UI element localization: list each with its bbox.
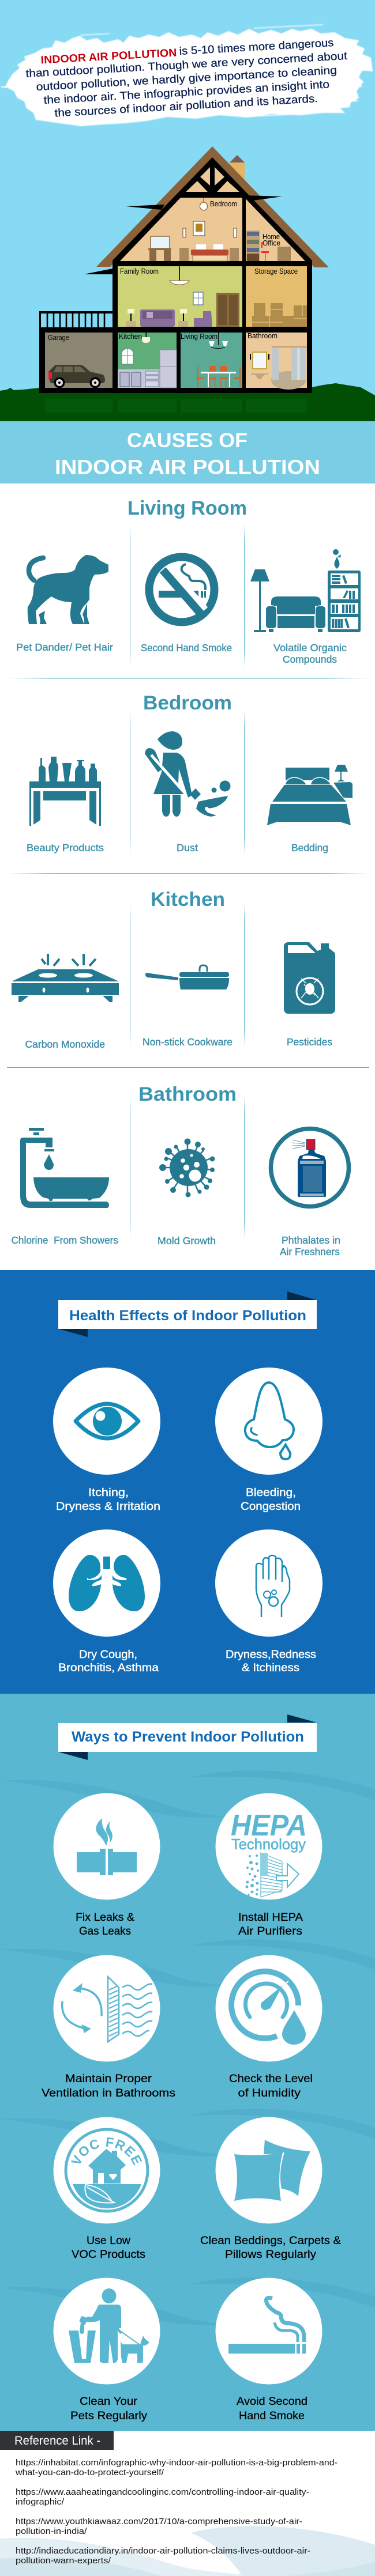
labels: Pets Regularly <box>70 2409 147 2422</box>
room: bedroom <box>120 198 242 261</box>
reference links: https://inhabitat.com/infographic-why-indoor-air-pollution-is-a-big-problem-and- <box>16 2458 337 2468</box>
tip: HEPA filter: Technology <box>231 1835 306 1853</box>
reference links: pollution-in-india/ <box>16 2526 87 2536</box>
heading: Living Room <box>127 497 247 519</box>
banner: ways to prevent: Ways to Prevent Indoor Pollution <box>72 1729 304 1745</box>
icon: sofa, lamp and bookshelf <box>250 549 361 632</box>
panel: references <box>0 2431 375 2576</box>
labels <box>12 1234 340 1257</box>
labels: Dryness,Redness <box>226 1648 316 1661</box>
labels: Congestion <box>241 1500 301 1513</box>
house illustration <box>39 146 329 393</box>
room: storage space: Storage Space <box>254 267 298 275</box>
labels: Phthalates in <box>282 1234 340 1246</box>
labels: Compounds <box>283 654 337 665</box>
room: bathroom: Bathroom <box>247 332 278 340</box>
labels <box>16 641 347 665</box>
intro text: the sources of indoor air pollution and its hazards. <box>54 93 318 119</box>
icon: bathtub and tap <box>20 1128 109 1208</box>
tip: VOC free badge: VOC FREE <box>70 2137 142 2166</box>
icon: mold virus <box>159 1139 215 1198</box>
panel: bedroom <box>7 692 369 874</box>
icon: bed <box>267 765 352 825</box>
reference links: pollution-warn-experts/ <box>16 2556 111 2566</box>
labels: of Humidity <box>238 2087 301 2099</box>
panel: kitchen <box>7 889 369 1068</box>
effect: nose <box>215 1368 322 1475</box>
title: INDOOR AIR POLLUTION <box>55 456 320 478</box>
eave spikes <box>84 195 282 274</box>
panel: bathroom <box>12 1083 348 1257</box>
intro text: than outdoor pollution. Though we are very concerned about <box>25 50 348 80</box>
labels: Install HEPA <box>238 1911 303 1924</box>
icon: non-stick pan <box>145 965 229 989</box>
labels: & Itchiness <box>242 1661 299 1674</box>
icon: car <box>48 365 105 388</box>
panel: health effects <box>0 1270 375 1694</box>
labels: Gas Leaks <box>79 1925 131 1937</box>
room: family room: Family Room <box>120 267 159 275</box>
effect: eye <box>53 1368 160 1475</box>
labels: Beauty Products <box>27 842 104 853</box>
icon: dog <box>28 555 108 624</box>
icon: woman sweeping dust <box>145 731 231 817</box>
tip: pets <box>53 2277 160 2385</box>
labels: Second Hand Smoke <box>141 642 232 654</box>
tip: humidity gauge <box>216 1955 322 2062</box>
heading: Bedroom <box>143 692 232 714</box>
labels: VOC Products <box>72 2248 145 2261</box>
ground <box>0 383 375 422</box>
intro text: is 5-10 times more dangerous <box>179 37 334 58</box>
effect: lungs <box>53 1529 160 1637</box>
labels: Fix Leaks & <box>76 1911 134 1924</box>
room: kitchen: Kitchen <box>119 333 142 341</box>
attic truss <box>186 167 239 192</box>
intro text: INDOOR AIR POLLUTION <box>40 47 177 66</box>
room: bedroom: Bedroom <box>210 200 237 208</box>
labels: Chlorine From Showers <box>12 1234 118 1246</box>
room: family room <box>118 266 242 327</box>
labels <box>25 1036 332 1050</box>
room: home office: Office <box>262 239 280 247</box>
banner: health effects <box>58 1291 317 1337</box>
balcony rail <box>39 311 112 327</box>
panel: causes title band <box>0 421 375 484</box>
icon: chimney <box>230 155 245 180</box>
room: storage space <box>246 266 307 327</box>
tip: VOC free badge <box>53 2117 160 2223</box>
labels: Mold Growth <box>158 1235 216 1247</box>
labels: Avoid Second <box>237 2395 308 2408</box>
effect: skin hand <box>215 1529 322 1637</box>
reference heading <box>0 2431 114 2450</box>
labels: Maintain Proper <box>65 2072 152 2085</box>
labels: Itching, <box>88 1486 129 1499</box>
labels: Clean Your <box>80 2395 138 2408</box>
labels: Non-stick Cookware <box>142 1036 232 1048</box>
title <box>55 429 320 478</box>
labels: Ventilation in Bathrooms <box>42 2087 175 2099</box>
heading: Kitchen <box>151 889 225 911</box>
banner: health effects: Health Effects of Indoor Pollution <box>69 1308 306 1324</box>
labels: Carbon Monoxide <box>25 1038 105 1050</box>
icon: stove <box>12 954 119 1002</box>
icon: no smoking <box>149 557 215 622</box>
labels: Bleeding, <box>246 1486 296 1499</box>
labels: Use Low <box>87 2234 131 2247</box>
house frame <box>39 157 312 393</box>
labels <box>27 842 328 853</box>
labels: Clean Beddings, Carpets & <box>200 2234 341 2247</box>
reference links: infographic/ <box>16 2497 65 2507</box>
room: kitchen <box>118 333 177 388</box>
title: CAUSES OF <box>127 429 247 452</box>
reference links <box>15 2458 337 2566</box>
room: living room <box>181 333 242 388</box>
reference links: what-you-can-do-to-protect-yourself/ <box>15 2468 164 2477</box>
intro text: outdoor pollution, we hardly give importance to cleaning <box>36 65 337 93</box>
intro brush stroke <box>1 24 373 126</box>
reference links: http://indiaeducationdiary.in/indoor-air-pollution-claims-lives-outdoor-air- <box>16 2546 310 2556</box>
labels: Bedding <box>291 842 328 853</box>
labels: Hand Smoke <box>239 2409 305 2422</box>
labels: Air Freshners <box>280 1246 340 1257</box>
labels <box>42 1911 341 2422</box>
intro text: the indoor air. The infographic provides an insight into <box>43 78 330 107</box>
reference links: https://www.aaaheatingandcoolinginc.com/controlling-indoor-air-quality- <box>16 2487 309 2497</box>
reference heading: Reference Link - <box>14 2434 100 2447</box>
icon: air freshener spray <box>271 1128 348 1207</box>
labels <box>56 1486 316 1674</box>
room: living room: Living Room <box>181 333 217 341</box>
panel: sky hero <box>0 0 375 422</box>
panel: prevention <box>0 1694 375 2431</box>
room: home office: Home <box>262 233 280 241</box>
labels: Check the Level <box>229 2072 313 2085</box>
room: home office <box>246 199 305 261</box>
panel: living room <box>7 497 369 679</box>
icon: beauty table <box>29 757 101 826</box>
labels: Pillows Regularly <box>225 2248 316 2261</box>
intro text <box>25 37 348 119</box>
tip: HEPA filter: HEPA <box>231 1809 307 1842</box>
room: garage: Garage <box>48 334 69 342</box>
tip: pillows <box>216 2117 322 2223</box>
reference links: https://www.youthkiawaaz.com/2017/10/a-comprehensive-study-of-air- <box>16 2517 302 2526</box>
tip: avoid smoke <box>216 2277 322 2385</box>
labels: Pet Dander/ Pet Hair <box>16 641 113 653</box>
room: garage <box>45 333 112 388</box>
tip: fix leaks <box>53 1793 160 1899</box>
tip: HEPA filter <box>216 1793 322 1899</box>
icon: pesticide can <box>284 942 335 1014</box>
labels: Pesticides <box>287 1036 332 1048</box>
room: bathroom <box>246 332 307 390</box>
tip: ventilation <box>53 1955 160 2062</box>
labels: Dust <box>177 842 198 853</box>
labels: Bronchitis, Asthma <box>58 1661 159 1674</box>
labels: Volatile Organic <box>273 642 347 654</box>
roof <box>96 146 329 267</box>
labels: Dry Cough, <box>79 1648 137 1661</box>
labels: Dryness & Irritation <box>56 1500 160 1513</box>
heading: Bathroom <box>138 1083 237 1105</box>
banner: ways to prevent <box>58 1714 317 1760</box>
labels: Air Purifiers <box>238 1925 302 1937</box>
